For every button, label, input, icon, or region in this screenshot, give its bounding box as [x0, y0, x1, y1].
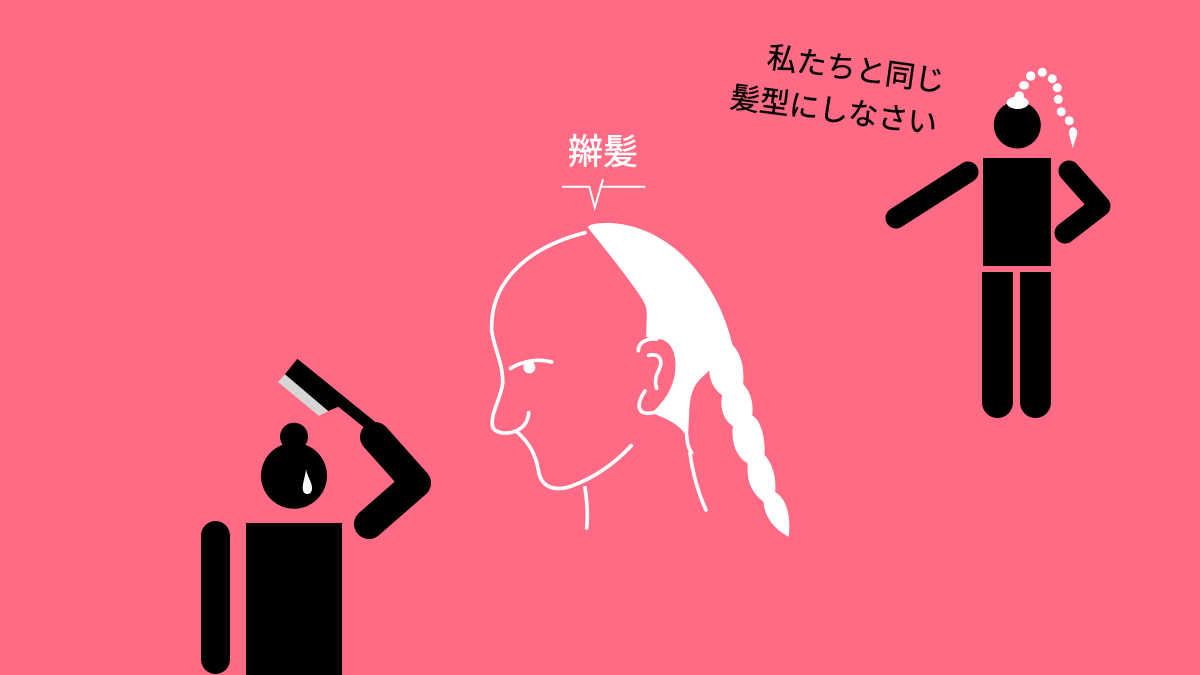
figure: man being shaved with razor — [201, 359, 416, 675]
raised arm — [369, 437, 416, 524]
callout tick under heading — [562, 179, 645, 207]
left arm — [201, 521, 230, 674]
illustration: head in profile with queue — [492, 223, 789, 536]
face outline — [492, 233, 706, 528]
figure: ruler with braid — [896, 68, 1100, 418]
torso — [246, 523, 342, 675]
razor blade — [278, 374, 328, 416]
bun — [280, 423, 308, 451]
label: queue hairstyle heading: 辮髪 — [568, 133, 638, 172]
left arm — [896, 172, 968, 218]
speech text — [728, 41, 947, 141]
legs — [982, 272, 1051, 418]
speech line 2: 髪型にしなさい — [728, 81, 939, 141]
sweat drop — [303, 469, 312, 494]
razor body and handle — [285, 359, 375, 428]
white braid — [1007, 68, 1077, 148]
head — [261, 443, 327, 509]
right arm on hip — [1065, 171, 1100, 233]
hair and braid — [588, 223, 789, 536]
speech line 1: 私たちと同じ — [765, 41, 947, 99]
torso — [983, 158, 1051, 266]
eye — [523, 361, 535, 373]
head — [994, 102, 1041, 148]
